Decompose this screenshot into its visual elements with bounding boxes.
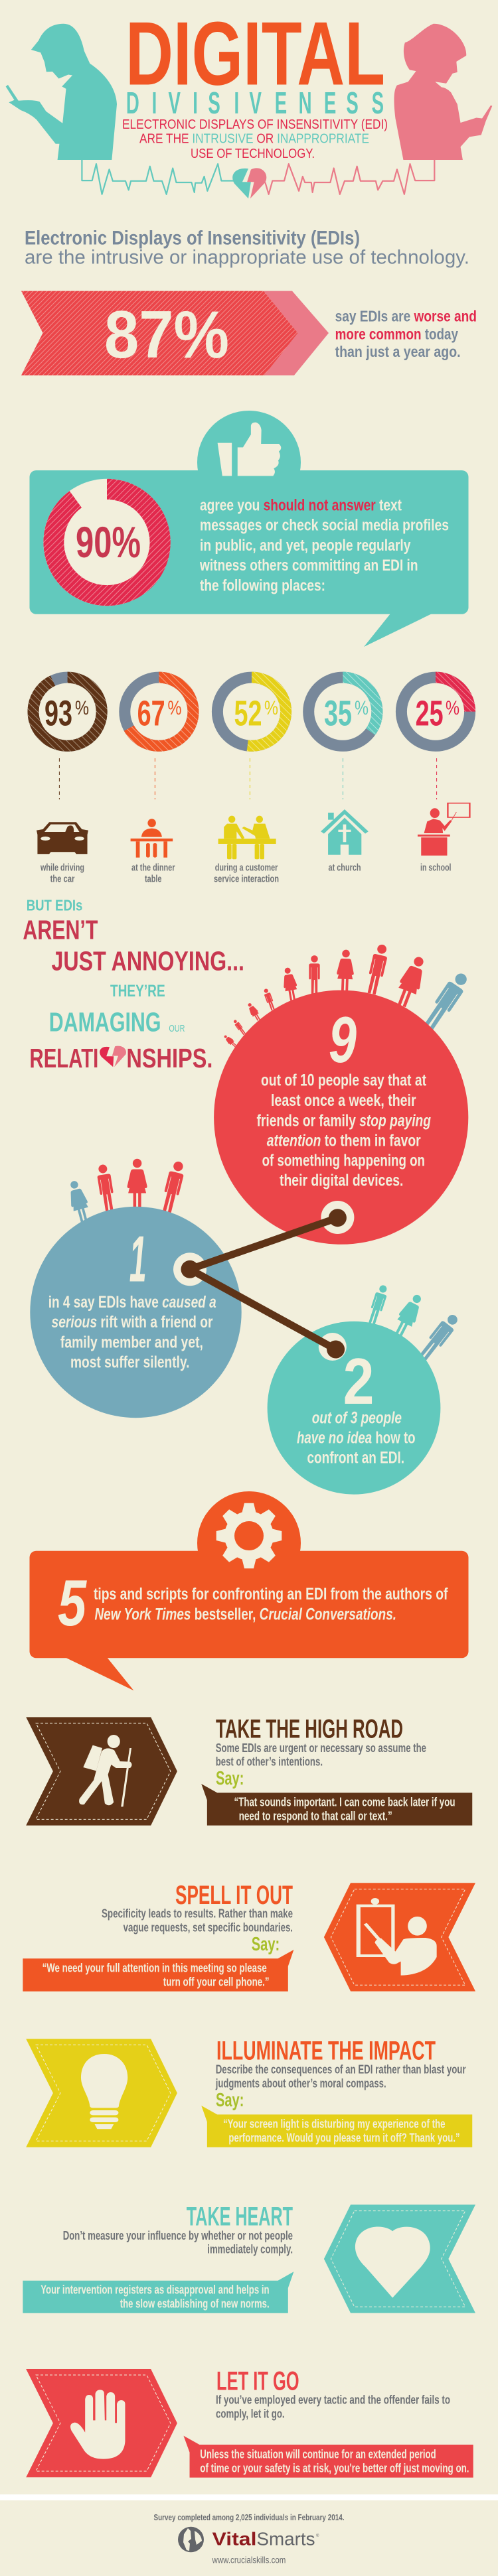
labels for places: the car <box>50 874 75 885</box>
tip description <box>216 1741 426 1769</box>
donut: 35% at church: % <box>355 697 369 719</box>
speech box with text <box>23 2271 293 2313</box>
heading: but EDIs aren't just annoying: OUR <box>169 1024 185 1034</box>
labels for places: during a customer <box>215 862 278 874</box>
heading: but EDIs aren't just annoying: NSHIPS. <box>126 1043 212 1073</box>
donut: 25% in school: % <box>446 697 459 719</box>
heading: but EDIs aren't just annoying: DAMAGING <box>49 1006 161 1037</box>
title: DIGITAL: DIGITAL <box>125 3 385 103</box>
Say label: Say: <box>216 2090 244 2111</box>
speech box with quote: turn off your cell phone.” <box>163 1974 270 1988</box>
donut: 67% at the dinner table <box>125 677 193 746</box>
icon: broken heart as letter O <box>100 1046 126 1067</box>
icon: man silhouette looking at phone <box>6 24 117 160</box>
stat: 87%: 87% <box>104 298 229 372</box>
tip title: TAKE HEART <box>187 2202 293 2231</box>
tip description: comply, let it go. <box>216 2406 285 2420</box>
badge with stop hand icon <box>26 2369 177 2477</box>
donut: 67% at the dinner table: % <box>167 697 182 719</box>
text: out of 10 people: friends or family stop paying <box>256 1111 431 1130</box>
heartbeat line: pink <box>265 160 434 194</box>
panel: 1 in 4 circle <box>30 1159 242 1418</box>
text: out of 10 people: least once a week, their <box>271 1091 416 1110</box>
text: out of 10 people: of something happening on <box>262 1152 425 1170</box>
panel: 90% speech bubble <box>29 411 469 647</box>
donut chart: 90%: 90% <box>76 517 141 567</box>
heartbeat line: teal <box>82 160 234 194</box>
text: tips and scripts: New York Times bestseller, Crucial Conversations. <box>94 1605 396 1624</box>
footer <box>154 2512 344 2565</box>
heading: but EDIs aren't just annoying: AREN’T <box>23 915 98 945</box>
tip description <box>216 2393 450 2420</box>
people standing on blue circle <box>65 1159 187 1223</box>
subtitle definition: USE OF TECHNOLOGY. <box>191 147 315 161</box>
text: out of 3 people <box>297 1409 416 1467</box>
text: tips and scripts <box>94 1585 448 1624</box>
heading: definition of EDIs: Electronic Displays of Insensitivity (EDIs) <box>25 228 360 249</box>
subtitle definition <box>122 117 388 161</box>
heading: but EDIs aren't just annoying: THEY’RE <box>110 982 165 1000</box>
panel: 1 in 4 circle: 1 <box>129 1223 147 1296</box>
people standing on teal circle <box>366 1284 461 1363</box>
text: agree you should not answer: witness others committing an EDI in <box>199 557 418 575</box>
tip: illuminate the impact <box>26 2036 472 2147</box>
tip: take heart <box>23 2202 475 2313</box>
people standing on red circle <box>222 943 471 1048</box>
badge with heart icon <box>324 2204 475 2313</box>
Say label: Say: <box>216 1768 244 1789</box>
text: out of 3 people: out of 3 people <box>312 1409 402 1428</box>
heading: but EDIs aren't just annoying: BUT EDIs <box>27 897 82 914</box>
panel: 2 out of 3 circle <box>268 1284 461 1495</box>
tip description: best of other’s intentions. <box>216 1755 323 1769</box>
heading: definition of EDIs <box>25 228 469 268</box>
logo icon: face oval <box>178 2527 204 2552</box>
panel: 87% banner <box>21 291 477 375</box>
heading: but EDIs aren't just annoying <box>23 897 244 1073</box>
text: in 4 say EDIs: family member and yet, <box>60 1333 203 1352</box>
text: in 4 say EDIs: serious rift with a friend or <box>52 1313 213 1331</box>
tip title: SPELL IT OUT <box>175 1881 293 1910</box>
speech box with text <box>183 2436 473 2478</box>
speech box with quote: need to respond to that call or text.” <box>239 1808 392 1822</box>
icon: teacher at lectern <box>418 803 469 856</box>
header: title and silhouettes <box>6 3 492 198</box>
text: out of 10 people: out of 10 people say that at <box>261 1071 427 1090</box>
labels for places: in school <box>420 862 452 874</box>
text: agree you should not answer: the following places: <box>200 577 325 595</box>
stat description <box>335 308 477 360</box>
labels for places <box>40 862 452 885</box>
number 5: 5 <box>58 1566 87 1639</box>
donut: 52% during customer service: % <box>264 697 278 719</box>
tip description: vague requests, set specific boundaries. <box>124 1921 293 1934</box>
logo wordmark: Vital <box>212 2529 256 2549</box>
subtitle definition: ARE THE INTRUSIVE OR INAPPROPRIATE <box>139 132 369 147</box>
tip title: TAKE THE HIGH ROAD <box>216 1715 403 1744</box>
donut: 35% at church: 35 <box>324 693 352 733</box>
text: out of 3 people: confront an EDI. <box>307 1449 404 1467</box>
speech box with quote <box>201 2106 472 2147</box>
icon: broken heart <box>232 168 266 198</box>
subtitle definition: ELECTRONIC DISPLAYS OF INSENSITIVITY (EDI) <box>122 117 388 132</box>
text: agree you should not answer: in public, and yet, people regularly <box>200 537 411 555</box>
logo wordmark: ® <box>316 2534 319 2538</box>
survey note: Survey completed among 2,025 individuals in February 2014. <box>154 2512 344 2522</box>
logo wordmark: Smarts <box>256 2529 315 2549</box>
stat description: say EDIs are worse and <box>335 308 477 325</box>
tip: spell it out <box>23 1881 475 1992</box>
tip description: Specificity leads to results. Rather than make <box>102 1907 293 1921</box>
red circle <box>214 990 468 1245</box>
panel: 9 out of 10 circle <box>214 943 471 1245</box>
connector linking the three circles <box>173 1201 354 1361</box>
tip description: judgments about other’s moral compass. <box>215 2076 386 2090</box>
tip description: Don’t measure your influence by whether or not people <box>63 2228 293 2242</box>
donut: 93% while driving <box>33 677 102 746</box>
Say label: Say: <box>252 1934 280 1955</box>
donut chart: 90% <box>43 479 171 606</box>
tip: let it go <box>26 2366 473 2478</box>
tip title: LET IT GO <box>216 2366 299 2396</box>
donut: 35% at church <box>309 677 377 746</box>
donut: 25% in school: 25 <box>416 693 444 733</box>
number 2: 2 <box>343 1345 374 1418</box>
tip description: immediately comply. <box>207 2242 293 2256</box>
heading: but EDIs aren't just annoying: RELATI <box>29 1043 98 1073</box>
text: out of 10 people: their digital devices. <box>280 1172 403 1190</box>
tip description <box>102 1907 293 1934</box>
labels for places: at the dinner <box>131 862 175 874</box>
teal circle <box>268 1322 440 1495</box>
icon: church <box>321 809 369 855</box>
heading: but EDIs aren't just annoying: JUST ANNOYING... <box>52 945 244 976</box>
badge with presenter icon <box>324 1883 475 1992</box>
text: in 4 say EDIs <box>48 1293 216 1372</box>
bubble shape <box>29 1491 469 1690</box>
text: in 4 say EDIs: most suffer silently. <box>70 1353 190 1372</box>
website: www.crucialskills.com <box>212 2555 286 2565</box>
speech box with quote <box>23 1950 293 1992</box>
text: out of 10 people: attention to them in favor <box>267 1131 421 1150</box>
donut: 25% in school <box>401 677 470 746</box>
panel: 5 tips speech bubble <box>29 1491 469 1690</box>
labels for places: at church <box>328 862 361 874</box>
speech box with quote <box>201 1784 472 1826</box>
speech box with text: the slow establishing of new norms. <box>120 2296 270 2310</box>
tip: take the high road <box>26 1715 472 1826</box>
donut: 67% at the dinner table: 67 <box>137 693 165 733</box>
blue circle <box>30 1207 242 1418</box>
text: agree you should not answer <box>199 496 449 595</box>
logo wordmark <box>212 2529 319 2549</box>
badge with hiker icon <box>26 1717 177 1826</box>
labels for places: while driving <box>40 862 84 874</box>
title: DIVISIVENESS: DIVISIVENESS <box>126 87 384 121</box>
stat description: than just a year ago. <box>335 343 461 360</box>
donut: 52% during customer service <box>217 677 286 746</box>
badge with light bulb icon <box>26 2039 177 2147</box>
labels for places: table <box>145 874 162 885</box>
speech box with text: Your intervention registers as disapproval and helps in <box>41 2283 270 2297</box>
icon: woman silhouette looking at phone <box>394 24 492 160</box>
text: in 4 say EDIs: in 4 say EDIs have caused a <box>48 1293 216 1312</box>
donut: 93% while driving: % <box>75 697 89 719</box>
icon: gear <box>216 1503 282 1568</box>
tip description <box>215 2063 466 2090</box>
donut: 52% during customer service: 52 <box>234 693 262 733</box>
icon: thumbs up <box>218 423 281 476</box>
panel: places where EDIs occur <box>33 677 470 885</box>
text: out of 3 people: have no idea how to <box>297 1429 416 1448</box>
bubble shape <box>29 411 469 647</box>
labels for places: service interaction <box>214 874 279 885</box>
stat description: more common today <box>335 325 458 342</box>
text: agree you should not answer: agree you should not answer text <box>200 496 402 514</box>
number 9: 9 <box>329 1003 357 1076</box>
icon: person at dinner table <box>131 819 173 858</box>
heading: definition of EDIs: are the intrusive or inappropriate use of technology. <box>25 247 469 268</box>
arrow banner <box>21 291 329 375</box>
speech box with quote: “We need your full attention in this meeting so please <box>42 1961 267 1975</box>
donut: 93% while driving: 93 <box>44 693 72 733</box>
tip description <box>63 2228 293 2256</box>
icon: car <box>37 822 88 854</box>
icon: customer service interaction <box>218 816 276 859</box>
text: out of 10 people <box>256 1071 431 1190</box>
